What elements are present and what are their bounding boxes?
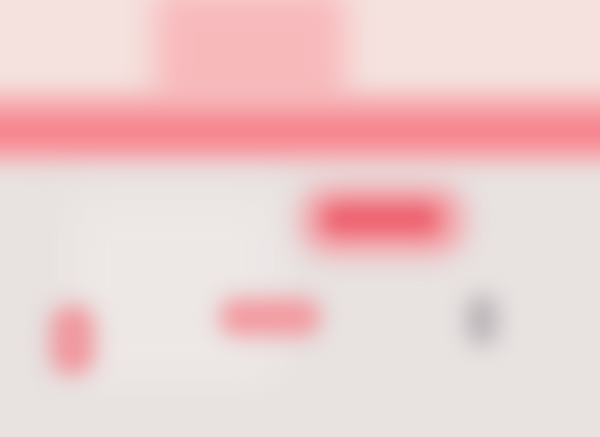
- callout: top right red block: [322, 204, 440, 234]
- banner band glow: [0, 94, 600, 162]
- panel: header background: [0, 0, 600, 130]
- heading block: [155, 0, 345, 105]
- icon: left red figure: [50, 305, 95, 375]
- icon: right grey figure: [466, 295, 498, 345]
- panel: lower background: [70, 195, 280, 385]
- callout halo: top right: [300, 185, 465, 255]
- banner band: [0, 116, 600, 146]
- callout: centre red block: [220, 298, 320, 336]
